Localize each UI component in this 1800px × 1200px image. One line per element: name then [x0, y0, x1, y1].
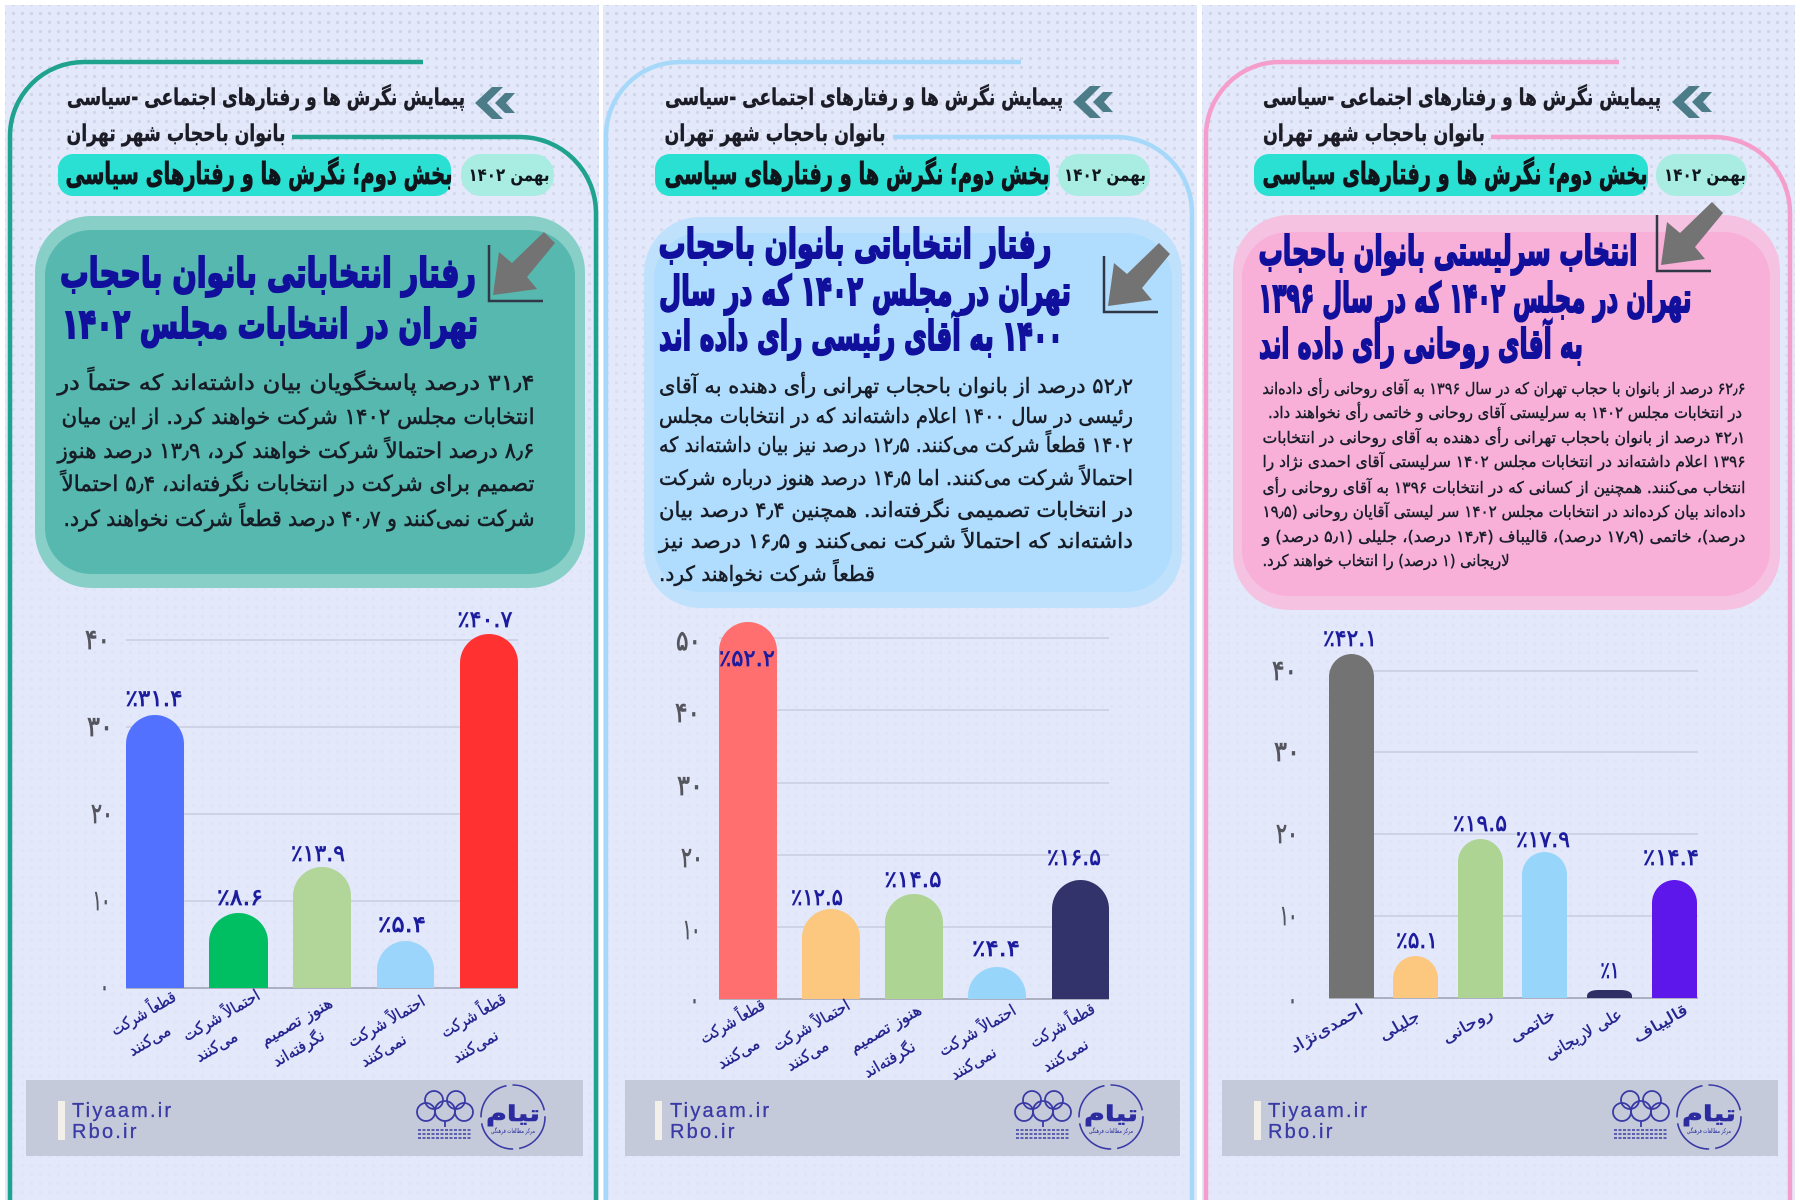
date pill: [461, 154, 554, 196]
panel title: تهران در مجلس ۱۴۰۲ که در سال: [659, 267, 1071, 315]
panel title: ۱۴۰۰ به آقای رئیسی رای داده اند: [659, 311, 1063, 360]
survey heading: بانوان باحجاب شهر تهران: [664, 121, 886, 147]
x axis labels: نمی‌کنند: [1039, 1035, 1092, 1076]
body text: ۱۳۹۶ اعلام داشته‌اند در انتخابات مجلس ۱۴۰۲ سرلیستی آقای احمدی نژاد را: [1262, 452, 1746, 472]
value labels: [126, 607, 512, 938]
x axis labels: روحانی: [1439, 1003, 1496, 1048]
section pill: [58, 154, 452, 196]
value labels: ٪۵۲.۲: [719, 646, 775, 672]
panel frame: [606, 62, 1192, 1200]
date pill: بهمن ۱۴۰۲: [468, 165, 550, 186]
y axis labels: ۴۰: [1272, 654, 1297, 687]
survey heading: پیمایش نگرش ها و رفتارهای اجتماعی -سیاسی: [67, 84, 465, 111]
footer: [26, 1080, 583, 1156]
body text: انتخابات مجلس ۱۴۰۲ شرکت خواهند کرد. از این میان: [62, 405, 534, 430]
panel title: رفتار انتخاباتی بانوان باحجاب: [60, 249, 476, 297]
panel frame: [10, 62, 596, 1200]
logo: tree emblem: [1613, 1091, 1669, 1138]
panel title: تهران در انتخابات مجلس ۱۴۰۲: [62, 300, 478, 348]
x axis labels: نمی‌کنند: [357, 1030, 410, 1071]
value labels: ٪۴.۴: [972, 936, 1020, 962]
x axis labels: احتمالاً شرکت: [179, 984, 264, 1046]
icon: double chevron: [1073, 86, 1113, 118]
body text: در انتخابات مجلس ۱۴۰۲ به سرلیستی آقای روحانی و خاتمی رأی نخواهند داد.: [1268, 402, 1742, 423]
x axis labels: علی لاریجانی: [1541, 1005, 1626, 1065]
panel: turnout of women who voted for Raisi: [603, 5, 1197, 1200]
bars: [126, 634, 518, 988]
text box: [1233, 202, 1780, 610]
value labels: [1323, 626, 1699, 984]
value labels: ٪۱۳.۹: [291, 841, 345, 867]
y axis labels: ۰: [690, 983, 699, 1016]
logo: Tiyam circle: [1079, 1085, 1143, 1149]
section pill: بخش دوم؛ نگرش ها و رفتارهای سیاسی: [66, 156, 452, 192]
value labels: ٪۵.۴: [378, 912, 426, 938]
y axis labels: ۱۰: [1280, 899, 1297, 932]
bars: [1329, 654, 1697, 998]
footer: Rbo.ir: [72, 1121, 139, 1143]
x axis labels: [695, 993, 1099, 1084]
body text: داده‌اند بیان کرده‌اند در انتخابات مجلس ۱۴۰۲ سر لیستی آقایان روحانی (۱۹٫۵: [1262, 502, 1746, 522]
value labels: ٪۱۹.۵: [1453, 811, 1507, 837]
value labels: ٪۱: [1600, 958, 1620, 984]
date pill: بهمن ۱۴۰۲: [1064, 165, 1146, 186]
footer: Rbo.ir: [670, 1121, 737, 1143]
date pill: [1058, 154, 1150, 196]
y axis labels: [85, 623, 113, 1003]
body text: داشته‌اند که احتمالاً شرکت نمی‌کنند و ۱۶٫۵ درصد نیز: [658, 527, 1133, 553]
section pill: [655, 154, 1050, 196]
value labels: ٪۱۶.۵: [1047, 845, 1101, 871]
bar chart: turnout: [85, 607, 518, 1072]
x axis labels: قطعاً شرکت: [436, 987, 510, 1042]
body text: احتمالاً شرکت می‌کنند. اما ۱۴٫۵ درصد هنوز درباره شرکت: [659, 464, 1133, 490]
body text: ۸٫۶ درصد احتمالاً شرکت خواهند کرد، ۱۳٫۹ درصد هنوز: [57, 436, 535, 464]
x axis labels: [1286, 1000, 1691, 1065]
y axis labels: [1272, 654, 1300, 1016]
body text: ۱۴۰۲ قطعاً شرکت می‌کنند. ۱۲٫۵ درصد نیز بیان داشته‌اند که: [659, 429, 1133, 457]
x axis labels: قطعاً شرکت: [1025, 997, 1099, 1052]
text box: [644, 217, 1182, 608]
x axis labels: احمدی‌نژاد: [1286, 1000, 1367, 1058]
date pill: بهمن ۱۴۰۲: [1664, 165, 1746, 186]
y axis labels: [675, 624, 703, 1016]
value labels: [719, 646, 1101, 962]
y axis labels: ۱۰: [683, 913, 700, 946]
footer: [1222, 1080, 1778, 1156]
body text: [1261, 378, 1746, 571]
panel title: [658, 220, 1071, 360]
y axis labels: ۵۰: [676, 624, 701, 657]
y axis labels: ۳۰: [677, 769, 703, 802]
y axis labels: ۰: [1288, 983, 1297, 1016]
y axis labels: ۲۰: [1276, 817, 1298, 850]
x axis labels: احتمالاً شرکت: [935, 999, 1020, 1061]
footer: [625, 1080, 1180, 1156]
x axis labels: قطعاً شرکت: [695, 993, 769, 1048]
y axis labels: ۱۰: [93, 884, 110, 917]
y axis labels: ۲۰: [91, 797, 113, 830]
y axis labels: ۳۰: [87, 710, 113, 743]
survey heading: بانوان باحجاب شهر تهران: [66, 121, 286, 147]
value labels: ٪۱۴.۴: [1643, 845, 1699, 871]
value labels: ٪۳۱.۴: [126, 686, 182, 712]
x axis labels: جلیلی: [1375, 1006, 1423, 1044]
y axis labels: ۲۰: [681, 841, 703, 874]
icon: double chevron: [475, 87, 515, 119]
footer: Tiyaam.ir: [1268, 1100, 1369, 1122]
bar chart: turnout among Raisi voters: [675, 622, 1109, 1084]
x axis labels: قالیباف: [1630, 1000, 1691, 1046]
icon: double chevron: [1672, 86, 1712, 118]
icon: arrow: [1104, 243, 1170, 312]
x axis labels: هنوز تصمیم: [257, 993, 336, 1050]
x axis labels: می‌کنند: [783, 1036, 832, 1075]
x axis labels: [106, 984, 510, 1072]
x axis labels: می‌کنند: [125, 1021, 174, 1060]
logo: Tiyam circle: [481, 1085, 545, 1149]
body text: رئیسی در سال ۱۴۰۰ اعلام داشته‌اند که در انتخابات مجلس: [659, 404, 1133, 428]
x axis labels: نمی‌کنند: [449, 1026, 502, 1067]
body text: [658, 372, 1133, 586]
survey heading: [66, 84, 465, 147]
y axis labels: ۳۰: [1274, 735, 1300, 768]
body text: ۶۲٫۶ درصد از بانوان با حجاب تهران که در سال ۱۳۹۶ به آقای روحانی رأی داده‌اند: [1262, 378, 1746, 399]
value labels: ٪۱۷.۹: [1516, 827, 1570, 853]
logo: Tiyam circle: تیام: [486, 1102, 540, 1127]
x axis labels: خاتمی: [1506, 1005, 1559, 1046]
x axis labels: نمی‌کنند: [947, 1043, 1000, 1084]
icon: arrow: [1657, 202, 1723, 271]
body text: ۴۲٫۱ درصد از بانوان باحجاب تهرانی رأی دهنده به آقای روحانی در انتخابات: [1262, 427, 1746, 448]
bar chart: list-head choice: [1272, 626, 1699, 1065]
section pill: [1254, 154, 1648, 196]
x axis labels: نگرفته‌اند: [860, 1037, 919, 1083]
panel frame: [1206, 62, 1790, 1200]
survey heading: بانوان باحجاب شهر تهران: [1263, 121, 1485, 147]
bars: [719, 622, 1109, 999]
logo: Tiyam circle: مرکز مطالعات فرهنگی: [491, 1127, 535, 1135]
x axis labels: می‌کنند: [192, 1027, 241, 1066]
logo: tree emblem: [1015, 1091, 1071, 1138]
body text: در انتخابات تصمیمی نگرفته‌اند. همچنین ۴٫۴ درصد بیان: [659, 498, 1133, 522]
value labels: ٪۴۰.۷: [458, 607, 512, 633]
panel title: رفتار انتخاباتی بانوان باحجاب: [658, 220, 1052, 268]
logo: Tiyam circle: تیام: [1084, 1102, 1138, 1127]
value labels: ٪۱۴.۵: [884, 867, 942, 893]
survey heading: پیمایش نگرش ها و رفتارهای اجتماعی -سیاسی: [1263, 84, 1661, 111]
x axis labels: می‌کنند: [714, 1034, 763, 1073]
value labels: ٪۴۲.۱: [1323, 626, 1377, 652]
logo: Tiyam circle: [1677, 1085, 1741, 1149]
panel: list-head choice among Rouhani voters: [1202, 5, 1795, 1200]
section pill: بخش دوم؛ نگرش ها و رفتارهای سیاسی: [664, 156, 1050, 192]
body text: تصمیم برای شرکت در انتخابات نگرفته‌اند، ۵٫۴ احتمالاً: [60, 469, 534, 497]
footer: Rbo.ir: [1268, 1121, 1335, 1143]
panel title: [1258, 227, 1691, 369]
logo: tree emblem: [417, 1091, 473, 1138]
body text: انتخاب می‌کنند. همچنین از کسانی که در انتخابات ۱۳۹۶ به آقای روحانی رأی: [1262, 477, 1746, 498]
footer: Tiyaam.ir: [670, 1100, 771, 1122]
icon: arrow: [489, 232, 555, 301]
logo: Tiyam circle: مرکز مطالعات فرهنگی: [1089, 1127, 1133, 1135]
body text: شرکت نمی‌کنند و ۴۰٫۷ درصد قطعاً شرکت نخواهند کرد.: [64, 502, 534, 532]
y axis labels: ۴۰: [675, 696, 700, 729]
body text: ۵۲٫۲ درصد از بانوان باحجاب تهرانی رأی دهنده به آقای: [659, 372, 1133, 398]
value labels: ٪۱۲.۵: [791, 885, 843, 911]
date pill: [1656, 154, 1747, 196]
value labels: ٪۸.۶: [217, 885, 263, 911]
x axis labels: احتمالاً شرکت: [769, 994, 854, 1056]
body text: [56, 366, 535, 532]
survey heading: پیمایش نگرش ها و رفتارهای اجتماعی -سیاسی: [665, 84, 1063, 111]
footer: Tiyaam.ir: [72, 1100, 173, 1122]
body text: ۳۱٫۴ درصد پاسخگویان بیان داشته‌اند که حتماً در: [56, 366, 535, 396]
x axis labels: احتمالاً شرکت: [344, 990, 429, 1052]
survey heading: [1263, 84, 1661, 147]
y axis labels: ۰: [100, 970, 109, 1003]
body text: لاریجانی (۱ درصد) را انتخاب خواهند کرد.: [1262, 551, 1510, 571]
x axis labels: قطعاً شرکت: [106, 985, 180, 1040]
body text: قطعاً شرکت نخواهند کرد.: [659, 558, 875, 586]
logo: Tiyam circle: مرکز مطالعات فرهنگی: [1687, 1127, 1731, 1135]
panel title: [60, 249, 478, 348]
x axis labels: هنوز تصمیم: [846, 1000, 925, 1057]
survey heading: [664, 84, 1063, 147]
body text: درصد)، خاتمی (۱۷٫۹ درصد)، قالیباف (۱۴٫۴ درصد)، جلیلی (۵٫۱ درصد) و: [1261, 527, 1746, 547]
logo: Tiyam circle: تیام: [1682, 1102, 1736, 1127]
y axis labels: ۴۰: [85, 623, 110, 656]
text box: [35, 216, 585, 588]
value labels: ٪۵.۱: [1396, 928, 1438, 954]
panel: turnout of veiled women in the 1402 election: [5, 5, 599, 1200]
x axis labels: نگرفته‌اند: [269, 1026, 328, 1072]
